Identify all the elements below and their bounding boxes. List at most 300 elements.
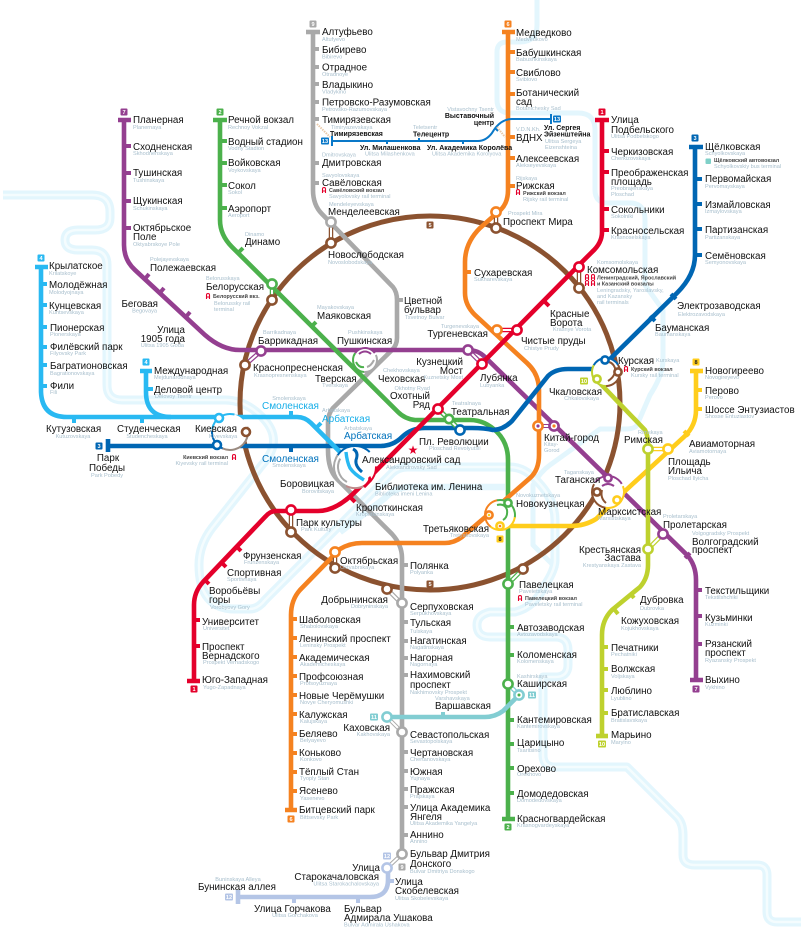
line 3 east stations: Щёлковский автовокзал bbox=[714, 157, 780, 164]
line 9 north stations: Алтуфьево bbox=[322, 27, 373, 38]
line 2 north stations: Динамо bbox=[245, 237, 281, 248]
line 6 south stations bbox=[299, 556, 398, 821]
line 3 west stations: Киевский вокзал bbox=[183, 454, 229, 461]
east stations: Шоссе Энтузиастов bbox=[705, 405, 795, 416]
line 6 south stations: Novye Cheryomushki bbox=[300, 700, 353, 706]
line 1 north stations: Сокольники bbox=[611, 205, 665, 216]
monorail stations: Ulitsa Milashenkova bbox=[365, 152, 416, 158]
line 7 north stations: Планерная bbox=[133, 115, 184, 126]
line 7 north stations: Щукинская bbox=[133, 196, 183, 207]
line 1 south stations: Юго-Западная bbox=[202, 675, 268, 686]
line 3 west stations: Парк bbox=[97, 453, 120, 464]
line 6 north stations: Medvedkovo bbox=[516, 37, 548, 43]
line 10 south stations: Волжская bbox=[611, 664, 655, 675]
line 7 north stations: Begovaya bbox=[132, 308, 158, 314]
line 1 north stations: rail terminals bbox=[597, 300, 629, 306]
central stations: Мост bbox=[440, 366, 464, 377]
line 6 north stations: Rijskaya bbox=[516, 176, 538, 182]
line 6 north stations: Ботанический bbox=[516, 88, 579, 99]
line 9 south stations: Nakhimovsky Prospekt bbox=[410, 690, 467, 696]
line 3 east stations: Первомайская bbox=[705, 174, 771, 185]
line number badges: 8 bbox=[498, 537, 502, 543]
line 4 stations: Studencheskaya bbox=[126, 434, 169, 440]
line 9 north stations: Petrovsko-Razumovskaya bbox=[322, 107, 388, 113]
line 1 south stations: Университет bbox=[202, 617, 260, 628]
line 5: brown ring bbox=[240, 216, 620, 590]
central stations: Barrikadnaya bbox=[263, 330, 297, 336]
line 9 south stations: Севастопольская bbox=[410, 730, 489, 741]
central stations: Ряд bbox=[413, 400, 430, 411]
line 6 south stations: Коньково bbox=[299, 748, 342, 759]
line 7 north stations: Улица bbox=[157, 325, 186, 336]
line 4 stations: Pionerskaya bbox=[50, 332, 82, 338]
line 6 south stations: Октябрьская bbox=[340, 556, 398, 567]
line 9 north stations: Савёловский вокзал bbox=[329, 187, 385, 194]
line 4 stations: Delovoy Tsentr bbox=[155, 394, 192, 400]
east stations: Авиамоторная bbox=[689, 439, 755, 450]
line 6 north stations: Сухаревская bbox=[474, 268, 532, 279]
line 2 south stations: Каширская bbox=[517, 679, 567, 690]
line 3 west stations: Киевская bbox=[195, 424, 237, 435]
line 1 south stations: Спортивная bbox=[227, 568, 281, 579]
line 10 south stations: Печатники bbox=[611, 643, 659, 654]
interchange: Turgenevskaya bbox=[492, 325, 522, 335]
east stations: Krestyanskaya Zastava bbox=[583, 563, 642, 569]
line 7 south stations: Текстильщики bbox=[705, 586, 769, 597]
line 7 north stations: Полежаевская bbox=[150, 263, 216, 274]
line 9 south stations: Чертановская bbox=[410, 748, 473, 759]
line 2 south stations: Avtozavodskaya bbox=[517, 632, 559, 638]
line 4 stations: Krilatskoye bbox=[49, 271, 76, 277]
line 2 south stations: Krasnogvardeyskaya bbox=[517, 823, 570, 829]
line 9 south stations: Пражская bbox=[410, 785, 455, 796]
line 10 south stations: Дубровка bbox=[640, 595, 684, 606]
line 9 south stations: Улица Академика bbox=[410, 803, 491, 814]
line 10 south stations: Pechatniki bbox=[611, 652, 637, 658]
interchange: Pushkinskaya, Tverskaya, Chekhovskaya bbox=[348, 343, 382, 377]
line 1 north stations: Komsomolskaya bbox=[597, 260, 639, 266]
line 9 north stations: Bibirevo bbox=[322, 54, 342, 60]
line 2 north stations: Vodny Stadion bbox=[228, 146, 264, 152]
interchange: Taganskaya, Marksistskaya bbox=[585, 469, 631, 515]
monorail stations: Vistavochny Tsentr bbox=[447, 107, 494, 113]
central stations: Kitay- bbox=[544, 442, 558, 448]
line 8: yellow bbox=[500, 371, 703, 526]
line 12: Butovo pale blue bbox=[238, 868, 394, 904]
line 9 south stations: Prajskaya bbox=[410, 794, 435, 800]
line 9 north stations: Otradnoye bbox=[322, 72, 348, 78]
line 9 north stations: Отрадное bbox=[322, 62, 368, 74]
central stations: Охотный bbox=[390, 391, 430, 402]
line 1 north stations: Красные bbox=[550, 309, 590, 320]
central stations: Краснопресненская bbox=[253, 363, 343, 374]
line 9 south stations: Полянка bbox=[410, 561, 449, 572]
central stations: Тверская bbox=[315, 374, 357, 385]
line 6 south stations: Profsoyuznaya bbox=[300, 681, 338, 687]
line 9 north stations: Vladykino bbox=[322, 90, 346, 96]
line 1 south stations bbox=[202, 551, 302, 691]
line 1 south stations: Проспект bbox=[202, 642, 245, 653]
line 4 stations: Arbatskaya bbox=[322, 408, 351, 414]
line 4 stations: Крылатское bbox=[49, 261, 103, 272]
central stations: Кропоткинская bbox=[356, 503, 423, 514]
line 12 stations: Ulitsa Skobelevskaya bbox=[395, 896, 449, 902]
line 9 north stations: Цветной bbox=[404, 296, 442, 307]
central stations: Александровский сад bbox=[362, 455, 461, 466]
central stations: Tverskaya bbox=[322, 383, 349, 389]
line number badges: 10 bbox=[599, 742, 605, 748]
monorail stations: Выставочный bbox=[445, 112, 494, 120]
east stations: Ploschad Ilyicha bbox=[668, 476, 709, 482]
central stations: Chistye Prudy bbox=[524, 346, 559, 352]
line 2 north stations: Dinamo bbox=[245, 232, 264, 238]
interchange: Komsomolskaya bbox=[574, 262, 584, 293]
interchange: Okhotny Ryad, Teatralnaya, Ploschad Revolyutsii bbox=[433, 404, 465, 435]
central stations: Chekhovskaya bbox=[383, 368, 421, 374]
line 4 stations: Kutuzovskaya bbox=[56, 434, 91, 440]
central stations: Gorod bbox=[544, 448, 560, 454]
line 3 west stations: Победы bbox=[89, 463, 125, 474]
line 4 stations: Молодёжная bbox=[49, 280, 107, 291]
east stations: Чкаловская bbox=[549, 387, 602, 398]
line 9 north stations: Савёловская bbox=[322, 178, 382, 189]
line 6 north stations: Бабушкинская bbox=[516, 48, 581, 59]
central stations: Кузнецкий bbox=[416, 357, 463, 368]
line 6 south stations: Калужская bbox=[299, 710, 348, 721]
east stations bbox=[549, 366, 795, 569]
line 9 south stations: Dobryninskaya bbox=[351, 604, 389, 610]
line 2 south stations: Kolomenskaya bbox=[517, 659, 555, 665]
line 1 north stations: Sokolniki bbox=[611, 214, 633, 220]
line 12 stations: Bulvar Admirala Ushakova bbox=[344, 922, 410, 928]
central stations: Баррикадная bbox=[258, 336, 318, 347]
line 3 west stations: Арбатская bbox=[344, 430, 392, 442]
interchange: Barrikadnaya bbox=[240, 346, 266, 370]
line 2 south stations: Орехово bbox=[517, 764, 557, 775]
east stations: Марксистская bbox=[598, 507, 661, 518]
line 6 north stations: Проспект Мира bbox=[503, 217, 573, 228]
line 12 stations: Старокачаловская bbox=[294, 872, 379, 883]
line 6 north stations: Свиблово bbox=[516, 68, 561, 79]
line 9 north stations: Novoslobodskaya bbox=[328, 260, 373, 266]
line 6: orange bbox=[285, 32, 539, 810]
line 7 north stations bbox=[121, 115, 216, 349]
line number badges: 7 bbox=[694, 687, 698, 693]
line 10: lime bbox=[595, 378, 648, 736]
line 13: monorail bbox=[317, 114, 551, 146]
interchange: Kievskaya bbox=[206, 408, 254, 456]
interchange: Bulvar Dmitriya Donskogo bbox=[382, 849, 407, 873]
east stations: Пролетарская bbox=[663, 520, 727, 531]
central stations: Ploschad Revolyutsii bbox=[429, 446, 481, 452]
line 9 south stations: Polyanka bbox=[410, 570, 434, 576]
east stations: Novogireyevo bbox=[705, 375, 739, 381]
central stations: Aleksandrovsky Sad bbox=[386, 465, 437, 471]
line 6 north stations: Рижский вокзал bbox=[523, 190, 566, 197]
line 6 south stations: Беляево bbox=[299, 729, 338, 740]
east stations: Shosse Entuziastov bbox=[705, 414, 754, 420]
line 2 south stations: Домодедовская bbox=[517, 789, 589, 800]
line number badges: 3 bbox=[97, 444, 101, 450]
line 7 south stations: Vykhino bbox=[705, 685, 725, 691]
line 1 north stations: Преображенская bbox=[611, 168, 688, 179]
line 1 north stations: Красносельская bbox=[611, 226, 684, 237]
line 9 north stations: Mendeleyevskaya bbox=[329, 202, 375, 208]
line 6 north stations: сад bbox=[516, 97, 532, 108]
line number badges: 11 bbox=[529, 693, 535, 699]
line 9 south stations: Sevastopolskaya bbox=[410, 739, 453, 745]
line 9 north stations: Timiryazevskaya bbox=[331, 125, 373, 131]
line number badges: 12 bbox=[226, 895, 232, 901]
line 3 west stations bbox=[89, 424, 392, 479]
line 2 north stations: Белорусский вкз. bbox=[213, 293, 260, 300]
interchange: Arbatskaya, Aleksandrovsky Sad, Borovitskaya, Biblioteka bbox=[326, 438, 384, 496]
line 3: dark blue bbox=[108, 147, 703, 452]
central stations: Чистые пруды bbox=[521, 336, 586, 347]
central stations: Krasnopresnenskaya bbox=[254, 373, 307, 379]
line 7 south stations: Ryazansky Prospekt bbox=[705, 658, 756, 664]
line 1 south stations: Yugo-Zapadnaya bbox=[203, 685, 246, 691]
line 6 south stations: Битцевский парк bbox=[299, 805, 375, 816]
monorail stations: Ул. Академика Королёва bbox=[427, 145, 512, 152]
line 9 north stations: Altufyevo bbox=[322, 37, 345, 43]
line 9 south stations: Южная bbox=[410, 767, 443, 778]
line 9: grey bbox=[306, 32, 408, 854]
line 3 west stations: Arbatskaya bbox=[344, 426, 373, 432]
line 2 south stations: Царицыно bbox=[517, 738, 565, 749]
line number badges: 9 bbox=[400, 865, 404, 871]
line 6 south stations: Новые Черёмушки bbox=[299, 691, 384, 702]
monorail stations: Teletsentr bbox=[413, 125, 437, 131]
line 10 south stations: Кожуховская bbox=[621, 616, 679, 627]
line 3 west stations: Smolenskaya bbox=[272, 463, 307, 469]
east stations: Застава bbox=[604, 553, 642, 564]
interchange: Dobryninskaya bbox=[382, 584, 407, 608]
line 3 east stations: Pervomayskaya bbox=[705, 184, 746, 190]
line number badges: 8 bbox=[694, 360, 698, 366]
line 3 east stations: Izmaylovskaya bbox=[705, 209, 743, 215]
line 7 north stations: Сходненская bbox=[133, 142, 192, 153]
interchange: Kitay-gorod bbox=[533, 421, 559, 431]
line number badges: 9 bbox=[311, 22, 315, 28]
line 6 south stations: Академическая bbox=[299, 653, 370, 664]
line 2 south stations: Orekhovo bbox=[517, 772, 541, 778]
line 7 south stations bbox=[705, 586, 769, 691]
line 2 south stations: Павелецкая bbox=[519, 580, 574, 591]
line 1 north stations: Улица bbox=[611, 115, 639, 126]
line 2 north stations: Сокол bbox=[228, 181, 256, 192]
line 2 north stations: terminal bbox=[214, 307, 234, 313]
line 4 stations: Smolenskaya bbox=[272, 396, 307, 402]
line 1 north stations: Ulitsa Podbelskogo bbox=[611, 134, 659, 140]
central stations: Лубянка bbox=[480, 373, 518, 384]
line number badges: 2 bbox=[506, 825, 510, 831]
east stations: Proletarskaya bbox=[663, 514, 698, 520]
line 12 stations: Ulitsa Gorchakova bbox=[272, 913, 319, 919]
line 1 north stations: и Казанский вокзалы bbox=[597, 280, 654, 288]
line 7 north stations: Тушинская bbox=[133, 168, 182, 179]
line number badges: 4 bbox=[144, 360, 148, 366]
line 9 north stations: Dmitrovskaya bbox=[322, 152, 357, 158]
line 6 north stations: Sukharevskaya bbox=[474, 277, 513, 283]
line 12 stations: Адмирала Ушакова bbox=[344, 913, 433, 924]
line 2 north stations: Aeroport bbox=[228, 213, 250, 219]
east stations: Perovo bbox=[705, 395, 723, 401]
line 1 south stations: Vorobyovy Gory bbox=[210, 605, 250, 611]
line 3 west stations: Park Pobedy bbox=[91, 473, 123, 479]
central stations: Turgenevskaya bbox=[441, 324, 480, 330]
line 9 north stations: Менделеевская bbox=[328, 207, 400, 218]
line 9 south stations: Nagatinskaya bbox=[410, 645, 445, 651]
line 1 south stations: Universitet bbox=[203, 626, 230, 632]
line 1 north stations: Подбельского bbox=[611, 125, 675, 136]
line 9 south stations: Нагатинская bbox=[410, 636, 467, 647]
central stations: Borovitskaya bbox=[302, 489, 335, 495]
line number badges: 6 bbox=[506, 22, 510, 28]
east stations: Chkalovskaya bbox=[564, 396, 600, 402]
line 9 south stations: Varshavskaya bbox=[435, 696, 471, 702]
line 4 stations: Филёвский парк bbox=[50, 342, 123, 353]
monorail stations: Тимирязевская bbox=[330, 131, 383, 138]
east stations: Площадь bbox=[668, 457, 711, 468]
line 9 south stations: Каховская bbox=[343, 723, 390, 734]
line 2 north stations: Voykovskaya bbox=[228, 168, 262, 174]
line 4 stations: Смоленская bbox=[262, 401, 319, 412]
line 6 north stations: Botanichesky Sad bbox=[516, 106, 561, 112]
interchange: Belorusskaya bbox=[267, 279, 277, 305]
line 6 south stations: Профсоюзная bbox=[299, 672, 363, 683]
icons: rail terminals bbox=[206, 188, 628, 601]
line number badges: 2 bbox=[218, 110, 222, 116]
line 10 south stations: Maryino bbox=[611, 740, 631, 746]
line 3 west stations: Kiyevskaya bbox=[209, 434, 238, 440]
line 1 north stations: Комсомольская bbox=[587, 265, 658, 276]
interchange: Kashirskaya bbox=[503, 679, 524, 700]
east stations: Volgogradsky Prospekt bbox=[692, 531, 750, 537]
monorail stations: Телецентр bbox=[413, 132, 449, 138]
line 4 stations: Filyovsky Park bbox=[50, 351, 86, 357]
line 6 south stations: Тёплый Стан bbox=[299, 767, 359, 778]
line 2 south stations: Кантемировская bbox=[517, 715, 592, 726]
line 9 south stations: Tulskaya bbox=[410, 629, 433, 635]
line 9 south stations: Nagornaya bbox=[410, 662, 438, 668]
interchange: Kuznetsky Most bbox=[463, 345, 487, 369]
central stations: Pushkinskaya bbox=[348, 330, 383, 336]
line 6 south stations: Shabolovskaya bbox=[300, 624, 339, 630]
line 2 north stations: Belorussky rail bbox=[214, 301, 250, 307]
line 12 stations: Бунинская аллея bbox=[198, 882, 276, 893]
line 6 south stations: Akademicheskaya bbox=[300, 662, 346, 668]
line 11: teal bbox=[387, 695, 519, 717]
line 4 stations: Molodyojnaya bbox=[49, 290, 84, 296]
central stations: Tretyakovskaya bbox=[450, 533, 490, 539]
central stations: Чеховская bbox=[378, 374, 425, 385]
line 9 south stations bbox=[321, 561, 491, 875]
central stations: Третьяковская bbox=[423, 524, 489, 535]
line 7 south stations: Кузьминки bbox=[705, 613, 753, 624]
line 6 south stations: Ленинский проспект bbox=[299, 634, 391, 645]
line 10 south stations: Dubrovka bbox=[640, 606, 665, 612]
line 7 north stations: Oktyabrskoye Pole bbox=[133, 242, 180, 248]
line 9 south stations: Chertanovskaya bbox=[410, 757, 451, 763]
line 10 south stations: Lyublino bbox=[611, 696, 632, 702]
line 6 north stations bbox=[474, 28, 581, 283]
line 6 south stations: Kalujskaya bbox=[300, 719, 328, 725]
line 7 south stations: проспект bbox=[705, 648, 746, 659]
line 4 stations: Bagrationovskaya bbox=[50, 371, 95, 377]
line 4 stations: Международная bbox=[154, 366, 228, 377]
line 1 north stations: Krasnye Vorota bbox=[553, 327, 592, 333]
line 7 south stations: Выхино bbox=[705, 675, 740, 686]
interchange: Proletarskaya bbox=[643, 529, 668, 554]
line 4 stations: Фили bbox=[50, 381, 74, 392]
line 1 south stations: Prospekt Vernadskogo bbox=[203, 660, 259, 666]
line 2 south stations: Коломенская bbox=[517, 650, 577, 661]
line 2 south stations: Paveletskaya bbox=[519, 589, 553, 595]
line 6 north stations: V.D.N.Kh. bbox=[516, 127, 541, 133]
central stations: Lubyanka bbox=[480, 383, 505, 389]
line 6 north stations: Prospekt Mira bbox=[508, 211, 543, 217]
monorail stations: Ул. Сергея bbox=[544, 125, 580, 132]
icon: Kremlin red star: ★ bbox=[408, 443, 418, 457]
line 2 north stations: Sokol bbox=[228, 190, 242, 196]
line 6 south stations: Шаболовская bbox=[299, 615, 361, 626]
line 1 north stations: Ворота bbox=[550, 318, 583, 329]
line 9 north stations: Владыкино bbox=[322, 80, 374, 91]
central stations: Театральная bbox=[451, 407, 510, 418]
line 4 stations: Багратионовская bbox=[50, 361, 128, 372]
line 1 north stations bbox=[550, 115, 688, 333]
line 6 north stations: ВДНХ bbox=[516, 133, 543, 144]
interchange: Rimskaya bbox=[643, 444, 673, 454]
line 4 stations: Fili bbox=[50, 390, 57, 396]
line 10 south stations: Bratislavskaya bbox=[611, 718, 648, 724]
line 1 north stations: Leningradsky, Yaroslavsky, bbox=[597, 288, 664, 294]
line 3 east stations: Kurskaya bbox=[656, 358, 680, 364]
central stations: Okhotny Ryad bbox=[395, 386, 430, 392]
line 9 south stations: Нагорная bbox=[410, 653, 453, 664]
line 4 stations: Кунцевская bbox=[49, 301, 101, 312]
interchange: Paveletskaya bbox=[503, 564, 528, 589]
line number badges: 1 bbox=[600, 110, 604, 116]
line number badges: 4 bbox=[39, 256, 43, 262]
line 3 east stations: Электрозаводская bbox=[677, 301, 761, 312]
line 2 south stations: Павелецкий вокзал bbox=[525, 595, 577, 602]
line 2 south stations: Paveletsky rail terminal bbox=[525, 602, 583, 608]
line 1 north stations: Krasnoselskaya bbox=[611, 235, 651, 241]
line 1 south stations: горы bbox=[209, 595, 230, 606]
line 12 stations: Ulitsa Starokachalovskaya bbox=[313, 882, 380, 888]
line 10 south stations: Voljskaya bbox=[611, 674, 636, 680]
line 9 south stations: Нахимовский bbox=[410, 670, 470, 681]
line 9 south stations: Bulvar Dmitriya Donskogo bbox=[410, 869, 475, 875]
line 6 south stations: Ясенево bbox=[299, 786, 338, 797]
line 1 north stations: Cherkizovskaya bbox=[611, 156, 651, 162]
line 10 south stations: Марьино bbox=[611, 730, 652, 741]
line 3 east stations: Курская bbox=[618, 356, 654, 367]
line 3 east stations: Партизанская bbox=[705, 225, 768, 236]
line 12 stations: Улица bbox=[395, 877, 423, 888]
line 1 south stations: Фрунзенская bbox=[243, 551, 302, 562]
line 7 north stations: Skhodnenskaya bbox=[133, 151, 174, 157]
line 4 stations: Арбатская bbox=[322, 413, 370, 425]
east stations: Ильича bbox=[668, 466, 702, 477]
line number badges: 6 bbox=[289, 817, 293, 823]
line 6 north stations: Babushkinskaya bbox=[516, 57, 558, 63]
line 2 north stations bbox=[206, 115, 371, 322]
line 7 south stations: Kuzminki bbox=[705, 622, 728, 628]
line number badges: 10 bbox=[581, 379, 587, 385]
